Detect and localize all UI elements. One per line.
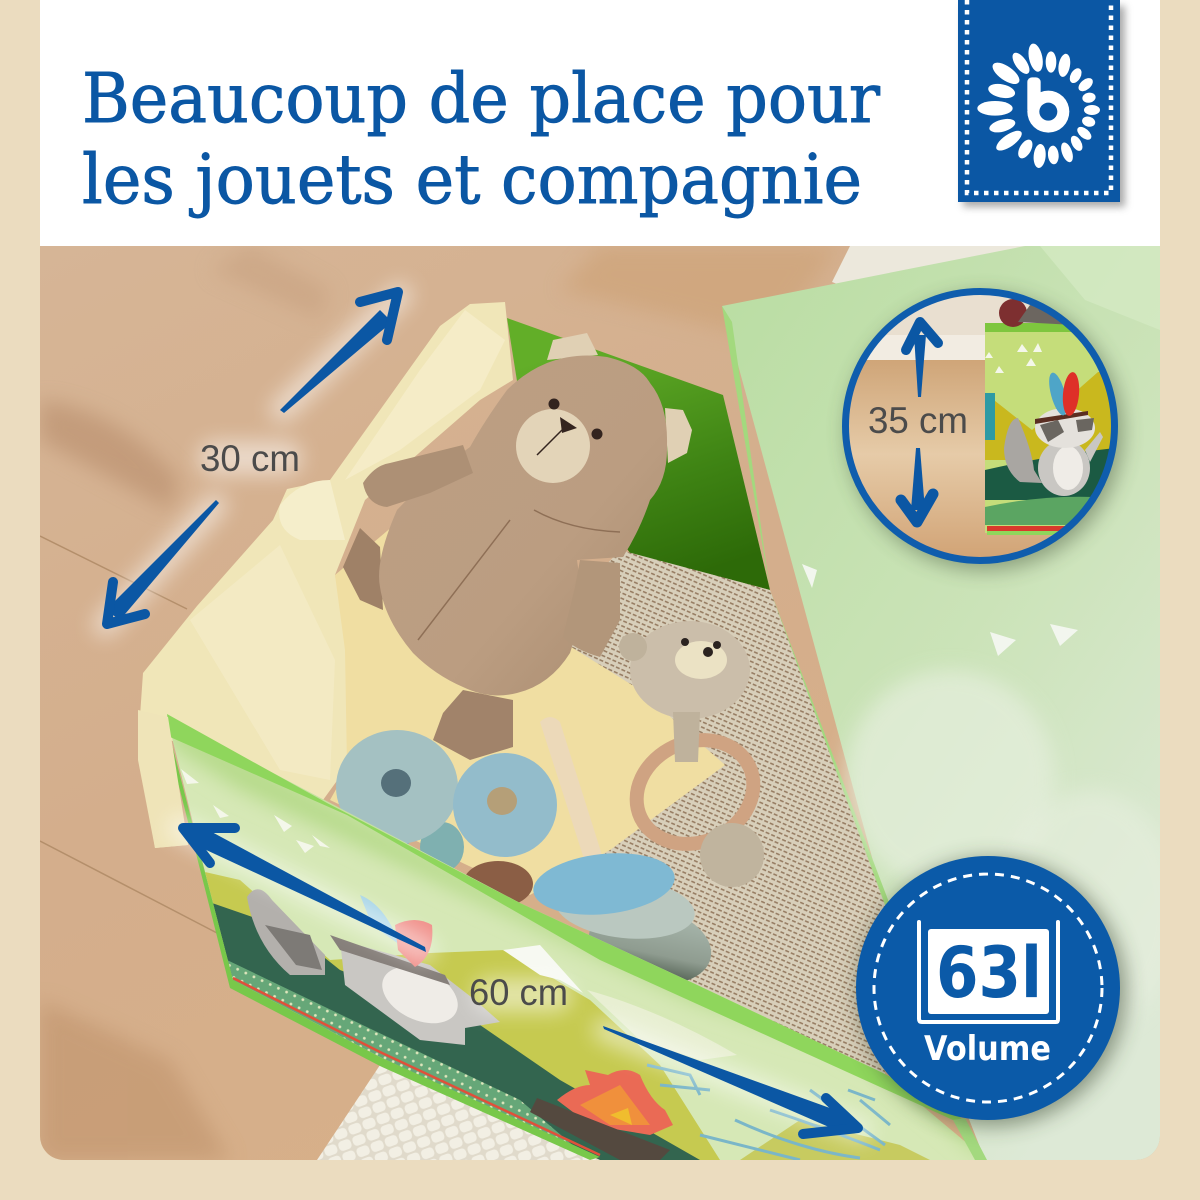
raccoon on the box	[247, 889, 500, 1045]
mesh mat inside box	[572, 552, 885, 1074]
volume badge shadow	[858, 858, 1126, 1126]
plush bear	[343, 333, 692, 760]
title: les jouets et compagnie	[82, 141, 862, 220]
logo tag	[958, 0, 1125, 207]
volume badge: Volume	[924, 1029, 1051, 1069]
right panel edge	[953, 1118, 987, 1160]
arrow: height down	[901, 448, 933, 522]
box rim green	[167, 714, 968, 1125]
panel triangles	[181, 769, 330, 853]
arrow glows	[105, 295, 860, 1130]
wooden floor	[40, 246, 1160, 1160]
box bottom trim	[166, 735, 600, 1160]
volume badge: 63l	[936, 932, 1042, 1014]
panel hills	[205, 872, 720, 1160]
header panel	[40, 0, 1160, 246]
rug bottom	[317, 1065, 600, 1160]
volume badge	[856, 856, 1120, 1120]
blue reeds	[647, 1065, 890, 1160]
arrow: 30 cm up	[280, 292, 398, 413]
label: 35 cm: 35 cm	[868, 400, 968, 441]
title: Beaucoup de place pour	[82, 60, 880, 139]
label: 30 cm: 30 cm	[200, 438, 300, 479]
wooden stacking toy	[336, 717, 719, 995]
label: 60 cm: 60 cm	[469, 972, 568, 1013]
inset raccoon	[1004, 371, 1103, 496]
panel ground	[212, 903, 700, 1160]
inset circle: height	[840, 285, 1130, 570]
arrow: 60 cm right	[603, 1026, 858, 1134]
front panel of the box	[172, 738, 975, 1160]
campfire	[530, 1070, 673, 1160]
lid of the box	[722, 246, 1180, 1160]
arrow: 30 cm down	[106, 500, 219, 624]
blanket	[138, 302, 513, 848]
box back wall	[507, 318, 770, 590]
knitted rattle bear and ring	[619, 621, 771, 887]
inner yellow cloth	[330, 520, 725, 895]
blanket overhang	[138, 710, 188, 848]
inset shadow	[847, 294, 1123, 570]
photo panel	[40, 246, 1180, 1170]
arrow: 60 cm left	[183, 824, 426, 952]
rug top	[832, 246, 1030, 285]
arrow: height up	[906, 322, 938, 397]
title	[82, 60, 880, 220]
